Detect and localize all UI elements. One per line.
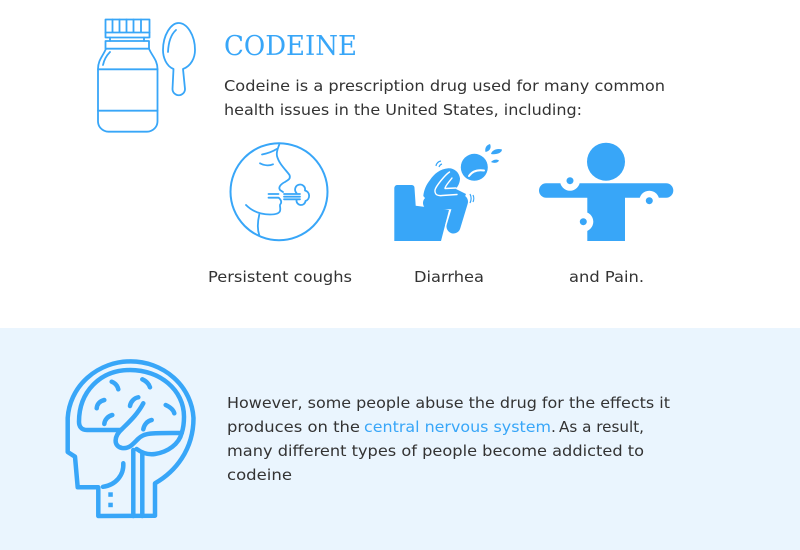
text: central nervous system paragraph: . [551,418,556,436]
text: central nervous system paragraph [227,394,670,484]
text: central nervous system paragraph: As a result, [559,418,644,436]
panel: brain section background [0,328,800,550]
text: central nervous system paragraph: However, some people abuse the drug for the effects it [227,394,670,412]
text: codeine intro [224,77,665,119]
label: diarrhea: Diarrhea [414,268,484,286]
text: codeine intro: Codeine is a prescription drug used for many common [224,77,665,95]
label: and pain: and Pain. [569,268,644,286]
icon: body pain [539,143,673,241]
icon: persistent cough [230,143,328,240]
heading: CODEINE: CODEINE [224,31,357,62]
icon: medicine bottle and spoon [98,20,195,132]
text: codeine intro: health issues in the United States, including: [224,101,582,119]
icon: brain dots [108,492,113,507]
text: central nervous system paragraph: codeine [227,466,292,484]
icon: diarrhea [394,144,502,241]
text: central nervous system paragraph: many different types of people become addicted to [227,442,644,460]
text: central nervous system paragraph: central nervous system [364,418,551,436]
icon: head with brain [68,361,194,516]
label: persistent coughs: Persistent coughs [208,268,352,286]
text: central nervous system paragraph: produces on the [227,418,360,436]
